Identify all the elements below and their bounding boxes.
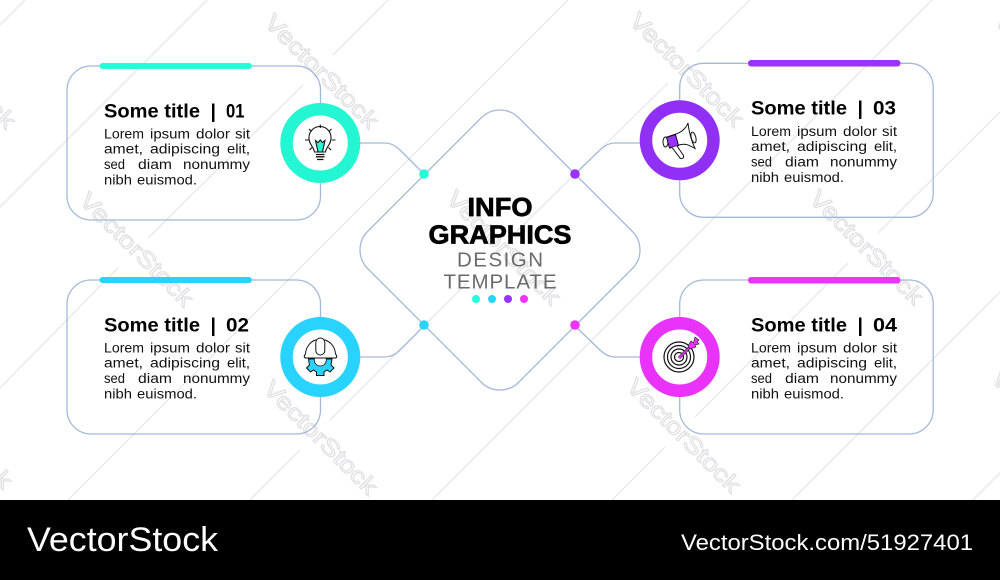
title 01: 01 bbox=[226, 100, 245, 122]
title 04 bbox=[751, 314, 897, 336]
subheading: DESIGN TEMPLATE: DESIGN bbox=[457, 249, 543, 272]
body text 03: sed bbox=[751, 154, 772, 170]
heading: INFO GRAPHICS: INFO bbox=[468, 192, 532, 222]
body text 01: elit, bbox=[227, 142, 250, 157]
connector dots bbox=[419, 169, 580, 330]
title 02: | bbox=[210, 314, 216, 336]
body text 04: Lorem bbox=[751, 340, 791, 356]
title 02: 02 bbox=[226, 314, 249, 336]
body text 02: Lorem bbox=[104, 340, 144, 356]
body text 01: euismod. bbox=[137, 172, 197, 187]
text: VectorStock bbox=[441, 185, 566, 310]
body text 03: Lorem bbox=[751, 124, 791, 139]
heading: INFO GRAPHICS: GRAPHICS bbox=[428, 220, 572, 250]
title 01: Some title bbox=[104, 100, 200, 122]
body text 02: ipsum bbox=[150, 340, 190, 356]
icon: megaphone ring bbox=[646, 107, 713, 174]
body text 02: amet, bbox=[104, 356, 143, 371]
body text 04: adipiscing bbox=[797, 356, 867, 371]
body text 01: diam bbox=[138, 157, 172, 172]
body text 02: sit bbox=[235, 340, 250, 356]
body text 03: amet, bbox=[751, 139, 790, 154]
title 03: Some title bbox=[751, 98, 847, 120]
body text 03: nibh bbox=[751, 170, 779, 185]
body text 03: elit, bbox=[874, 139, 897, 154]
title 04: | bbox=[858, 314, 863, 336]
body text 01: sit bbox=[235, 126, 250, 142]
body text 02 bbox=[104, 340, 250, 401]
title 02: Some title bbox=[104, 314, 200, 336]
body text 04: amet, bbox=[751, 356, 790, 371]
text: VectorStock bbox=[74, 187, 199, 312]
body text 02: sed bbox=[104, 371, 125, 386]
body text 04: sit bbox=[882, 340, 897, 356]
four colour dots bbox=[472, 295, 528, 303]
footer logo: VectorStock bbox=[27, 521, 219, 559]
body text 01: dolor bbox=[196, 126, 231, 142]
text: VectorStock bbox=[624, 7, 749, 132]
heading: INFO GRAPHICS bbox=[428, 192, 572, 250]
icon: light bulb ring bbox=[287, 109, 354, 177]
title 04: Some title bbox=[751, 314, 847, 336]
footer image id: VectorStock.com/51927401 bbox=[681, 530, 973, 555]
body text 01: nibh bbox=[104, 172, 132, 187]
text: VectorStock bbox=[621, 373, 746, 498]
body text 03: nonummy bbox=[830, 154, 897, 170]
title 03 bbox=[751, 98, 896, 120]
central diamond bbox=[349, 99, 651, 401]
body text 03: euismod. bbox=[784, 170, 844, 185]
title 04: 04 bbox=[873, 314, 897, 336]
subheading: DESIGN TEMPLATE: TEMPLATE bbox=[444, 270, 556, 294]
body text 04: dolor bbox=[843, 340, 878, 356]
body text 04: elit, bbox=[874, 356, 897, 371]
text: VectorStock bbox=[804, 185, 929, 310]
body text 02: elit, bbox=[227, 356, 250, 371]
title 02 bbox=[104, 314, 249, 336]
icon: target and arrow ring bbox=[646, 323, 713, 391]
body text 02: dolor bbox=[196, 340, 231, 356]
subheading: DESIGN TEMPLATE bbox=[444, 249, 556, 294]
footer bar bbox=[0, 500, 1000, 580]
title 01: | bbox=[210, 100, 216, 122]
panel: card 02 bbox=[67, 277, 320, 434]
body text 02: diam bbox=[138, 371, 172, 386]
body text 01: amet, bbox=[104, 142, 143, 157]
body text 03: sit bbox=[882, 124, 897, 139]
body text 04: sed bbox=[751, 371, 772, 386]
connector lines bbox=[358, 143, 642, 357]
body text 04: euismod. bbox=[784, 386, 844, 401]
body text 04: diam bbox=[785, 371, 819, 386]
body text 02: euismod. bbox=[137, 386, 197, 401]
body text 04 bbox=[751, 340, 897, 401]
body text 04: nibh bbox=[751, 386, 779, 401]
body text 01: Lorem bbox=[104, 126, 144, 142]
body text 01: nonummy bbox=[183, 157, 250, 172]
title 01 bbox=[104, 100, 245, 122]
title 03: 03 bbox=[873, 98, 896, 120]
icon: helmet and gear ring bbox=[287, 323, 354, 391]
body text 03 bbox=[751, 124, 897, 185]
text: VectorStock bbox=[258, 375, 383, 500]
body text 03: diam bbox=[785, 154, 819, 170]
central title bbox=[428, 192, 572, 303]
body text 01: sed bbox=[104, 157, 125, 172]
body text 01 bbox=[104, 126, 250, 187]
body text 04: ipsum bbox=[797, 340, 837, 356]
title 03: | bbox=[858, 98, 863, 120]
panel: card 04 bbox=[680, 277, 933, 434]
body text 02: adipiscing bbox=[150, 356, 220, 371]
body text 04: nonummy bbox=[830, 371, 897, 386]
body text 03: dolor bbox=[843, 124, 878, 139]
body text 03: ipsum bbox=[797, 124, 837, 139]
panel: card 03 bbox=[680, 60, 933, 217]
body text 01: ipsum bbox=[150, 126, 190, 142]
body text 03: adipiscing bbox=[797, 139, 867, 154]
body text 01: adipiscing bbox=[150, 142, 220, 157]
text: VectorStock bbox=[259, 9, 384, 134]
panel: card 01 bbox=[67, 63, 320, 220]
body text 02: nibh bbox=[104, 386, 132, 401]
body text 02: nonummy bbox=[183, 371, 250, 386]
